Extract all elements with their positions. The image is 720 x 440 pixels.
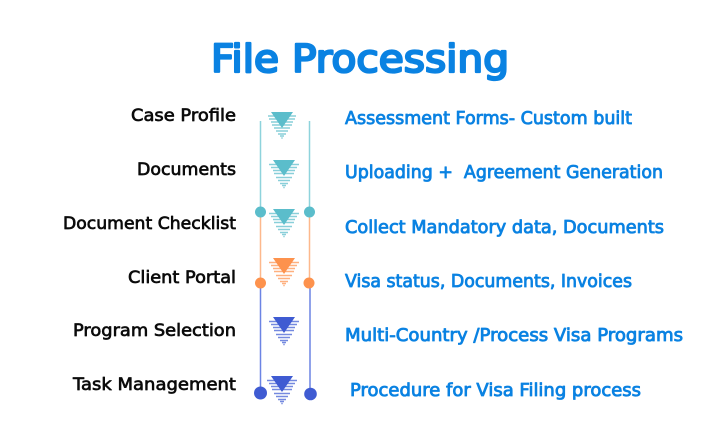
icon: teal funnel 1 (268, 112, 296, 138)
label: documents: Documents (137, 160, 236, 180)
description: uploading: Uploading + Agreement Generation (345, 163, 663, 183)
icon: teal funnel 2 (269, 160, 299, 188)
node: orange left (255, 278, 266, 288)
label: case profile: Case Profile (131, 106, 236, 126)
icon: blue funnel 1 (269, 317, 299, 344)
node: teal right (304, 206, 315, 218)
step descriptions (345, 109, 683, 401)
step labels (63, 106, 236, 395)
icon: blue funnel 2 (267, 376, 297, 404)
description: assessment forms: Assessment Forms- Custom built (345, 109, 632, 129)
node: teal left (255, 206, 266, 218)
connector lines and nodes (254, 121, 317, 400)
label: document checklist: Document Checklist (63, 214, 236, 234)
node: blue left (254, 386, 267, 400)
icon: teal funnel 3 (269, 209, 299, 236)
description: visa status: Visa status, Documents, Invoices (345, 272, 632, 292)
label: client portal: Client Portal (128, 268, 236, 288)
label: program selection: Program Selection (73, 321, 236, 341)
description: procedure: Procedure for Visa Filing process (350, 381, 641, 401)
title: File Processing (211, 37, 509, 82)
description: visa programs: Multi-Country /Process Visa Programs (345, 326, 683, 346)
node: orange right (304, 278, 314, 288)
node: blue right (304, 388, 317, 400)
icon: orange funnel (269, 258, 299, 286)
label: task management: Task Management (72, 375, 236, 395)
description: collect data: Collect Mandatory data, Documents (345, 218, 664, 238)
